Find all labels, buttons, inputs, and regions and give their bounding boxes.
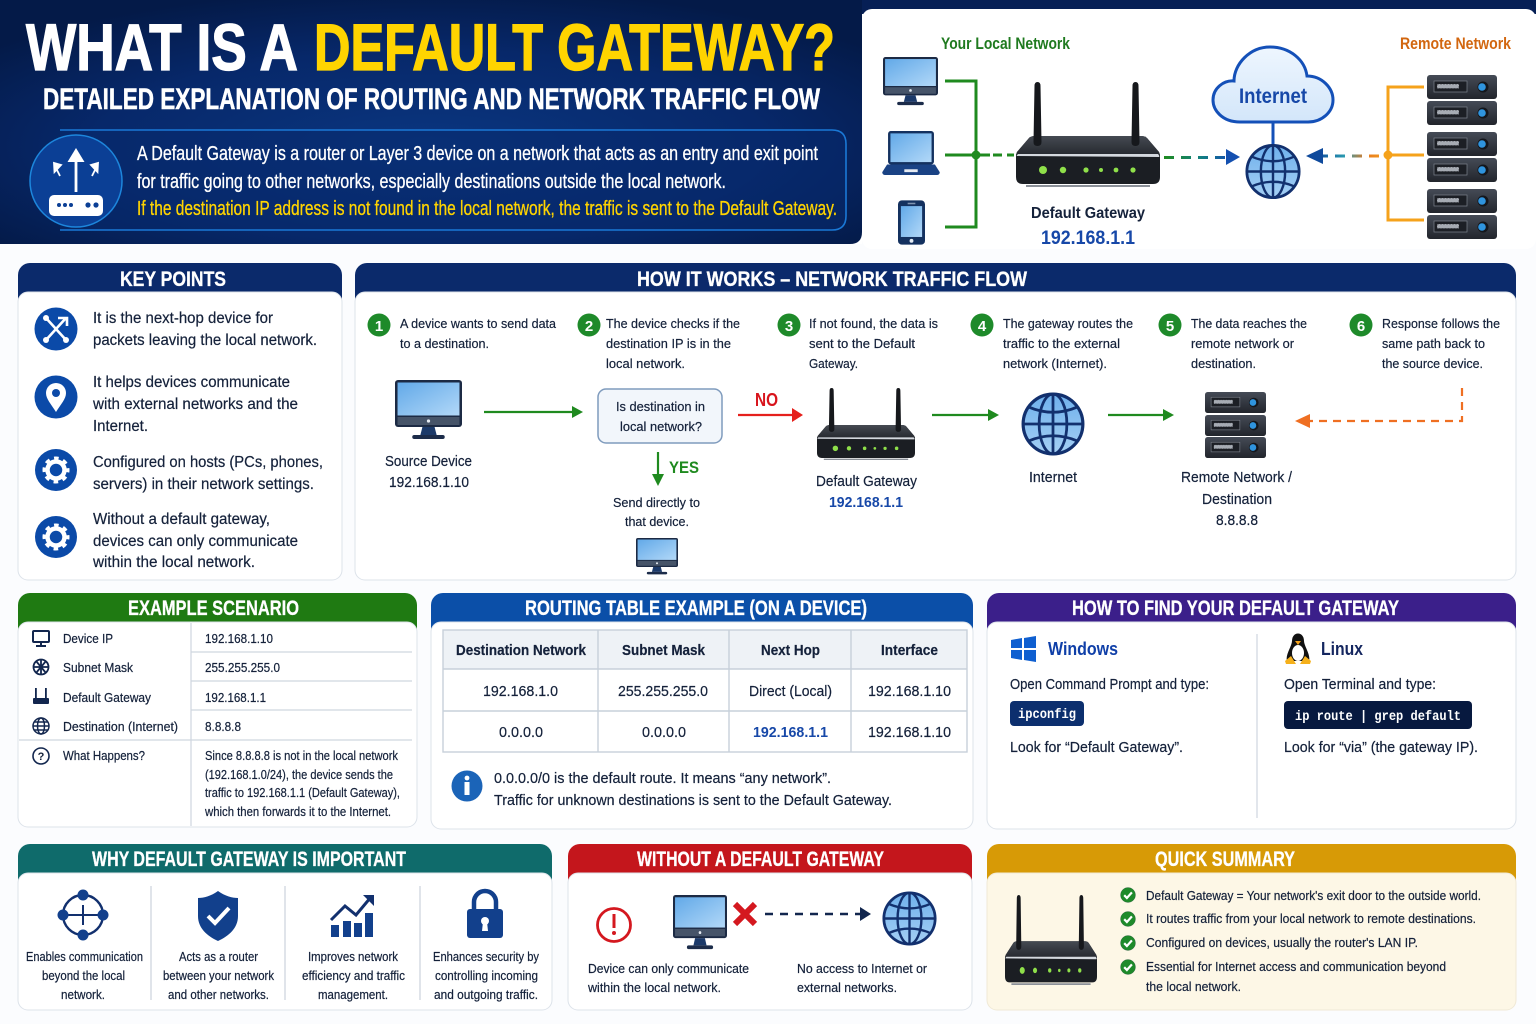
definition text: for traffic going to other networks, especially destinations outside the local network. <box>137 171 726 193</box>
step 1: to a destination. <box>400 336 489 351</box>
icon: globe <box>884 893 935 944</box>
note: default route <box>494 771 892 809</box>
panel: why important <box>18 844 552 1010</box>
step 4: 4 <box>978 318 987 335</box>
text: acts as router: Acts as a router <box>179 950 258 964</box>
panel: without gateway <box>568 844 972 1010</box>
checklist <box>1120 888 1481 994</box>
text: acts as router: between your network <box>163 969 275 983</box>
step 5 <box>1158 314 1307 371</box>
definition text <box>137 143 837 220</box>
step 3: sent to the Default <box>809 336 915 351</box>
arrow: yes <box>652 452 699 486</box>
row: device ip: 192.168.1.10 <box>205 632 273 646</box>
row: what happens: What Happens? <box>63 749 145 763</box>
default gateway label <box>816 474 918 511</box>
text: enables communication: Enables communication <box>26 950 143 964</box>
step 6: Response follows the <box>1382 316 1500 331</box>
step 3: If not found, the data is <box>809 316 938 331</box>
step 5: remote network or <box>1191 336 1295 351</box>
routing table: 0.0.0.0 <box>499 725 543 741</box>
text: no internet: external networks. <box>797 981 897 995</box>
row: device ip: Device IP <box>63 632 113 646</box>
step 1: A device wants to send data <box>400 316 557 331</box>
text: local only <box>587 962 749 995</box>
step 2: 2 <box>585 318 593 335</box>
routing table: 192.168.1.1 <box>753 725 828 741</box>
icon: warning <box>598 908 630 942</box>
text: without a gateway: within the local network. <box>92 554 255 571</box>
row: destination: 8.8.8.8 <box>205 720 241 734</box>
send directly text: Send directly to <box>613 495 700 510</box>
row: what happens: which then forwards it to the Internet. <box>204 805 391 819</box>
step 6: same path back to <box>1382 336 1485 351</box>
icon: internet globe <box>1023 394 1083 454</box>
label: remote network: Remote Network <box>1400 34 1511 53</box>
arrow: return path <box>1295 388 1462 428</box>
routing table <box>443 630 967 752</box>
icon: phone <box>898 200 925 245</box>
panel: routing table <box>431 593 973 829</box>
step 2: destination IP is in the <box>606 336 731 351</box>
routing table: Next Hop <box>761 643 820 659</box>
text: enhances security: and outgoing traffic. <box>434 988 538 1002</box>
icon: source device <box>395 380 462 439</box>
text: enables communication: beyond the local <box>42 969 125 983</box>
row: what happens <box>33 748 400 819</box>
routing table: 192.168.1.0 <box>483 684 558 700</box>
top banner panel <box>0 0 1536 249</box>
text: acts as router <box>163 950 275 1002</box>
step 5: destination. <box>1191 356 1256 371</box>
checklist: the local network. <box>1146 980 1241 994</box>
source device label: 192.168.1.10 <box>389 475 469 491</box>
row: what happens: traffic to 192.168.1.1 (Default Gateway), <box>205 786 400 800</box>
arrow: to internet <box>932 409 999 421</box>
routing table: Direct (Local) <box>749 684 832 700</box>
icon: router with arrows <box>30 135 122 227</box>
dashed arrow <box>765 907 871 921</box>
heading: ROUTING TABLE EXAMPLE (ON A DEVICE) <box>525 597 867 620</box>
linux steps <box>1284 677 1478 756</box>
step 6 <box>1350 314 1500 371</box>
heading: KEY POINTS <box>120 268 226 291</box>
routing table: 192.168.1.10 <box>868 684 951 700</box>
step 6: 6 <box>1357 318 1365 335</box>
decision box: Is destination in <box>616 399 705 414</box>
panel: quick summary <box>987 844 1516 1010</box>
row: destination <box>33 718 241 734</box>
icon: growth chart <box>331 895 374 937</box>
panel: example scenario <box>18 593 417 827</box>
row: what happens: ? <box>38 751 45 763</box>
step 2 <box>578 314 740 371</box>
icon: target device <box>636 538 678 574</box>
icon: internet cloud <box>1213 47 1333 146</box>
source device label <box>385 454 472 491</box>
definition text: A Default Gateway is a router or Layer 3 device on a network that acts as an entry and exit point <box>137 143 818 165</box>
callout: definition <box>30 130 846 230</box>
arrow: no <box>738 390 803 422</box>
windows steps: Look for “Default Gateway”. <box>1010 740 1183 756</box>
network diagram <box>882 34 1511 249</box>
remote network bus <box>1385 87 1424 220</box>
windows steps: ipconfig <box>1018 707 1076 723</box>
text: improves efficiency: efficiency and traffic <box>302 969 405 983</box>
text: improves efficiency: management. <box>318 988 388 1002</box>
icon: location pin <box>34 376 78 418</box>
text: enables communication <box>26 950 143 1002</box>
step 5: The data reaches the <box>1191 316 1307 331</box>
row: subnet mask: 255.255.255.0 <box>205 661 280 675</box>
source device label: Source Device <box>385 454 472 470</box>
routing table: Subnet Mask <box>622 643 706 659</box>
row: device ip <box>33 631 273 646</box>
icon: globe <box>1247 145 1299 198</box>
dashed arrow to globe <box>1164 149 1240 165</box>
panel: key points <box>18 263 342 580</box>
icon: monitor <box>673 895 727 949</box>
dashed arrow from remote <box>1306 148 1386 164</box>
linux steps: ip route | grep default <box>1295 709 1461 725</box>
subtitle: DETAILED EXPLANATION OF ROUTING AND NETWORK TRAFFIC FLOW <box>43 83 821 116</box>
step 4: traffic to the external <box>1003 336 1120 351</box>
title: DEFAULT GATEWAY? <box>314 10 835 84</box>
text: improves efficiency: Improves network <box>308 950 399 964</box>
arrow: no: NO <box>755 390 778 410</box>
heading: WITHOUT A DEFAULT GATEWAY <box>637 848 884 871</box>
step 2: local network. <box>606 356 685 371</box>
heading: EXAMPLE SCENARIO <box>128 597 299 620</box>
routing table: Interface <box>881 643 938 659</box>
text: external networks: Internet. <box>93 418 148 435</box>
icon: remote servers <box>1205 392 1266 458</box>
checklist: Configured on devices, usually the router's LAN IP. <box>1146 936 1418 950</box>
remote label: Remote Network / <box>1181 470 1293 486</box>
default gateway label: 192.168.1.1 <box>1041 228 1135 249</box>
text: without a gateway <box>92 511 298 571</box>
checklist: Essential for Internet access and communication beyond <box>1146 960 1446 974</box>
default gateway label: Default Gateway <box>816 474 918 490</box>
windows heading: Windows <box>1048 639 1118 659</box>
label: your local network: Your Local Network <box>941 34 1070 53</box>
heading: HOW TO FIND YOUR DEFAULT GATEWAY <box>1072 597 1399 620</box>
step 3 <box>778 314 938 371</box>
send directly text: that device. <box>625 514 689 529</box>
heading: WHY DEFAULT GATEWAY IS IMPORTANT <box>92 848 406 871</box>
text: external networks <box>92 374 298 435</box>
text: no internet <box>797 962 927 995</box>
windows steps <box>1010 677 1209 756</box>
panel: how it works <box>355 263 1516 580</box>
checklist: It routes traffic from your local network to remote destinations. <box>1146 912 1476 926</box>
text: configured on hosts: Configured on hosts (PCs, phones, <box>93 454 323 471</box>
text: enhances security: controlling incoming <box>435 969 538 983</box>
arrow: yes: YES <box>669 458 699 477</box>
text: no internet: No access to Internet or <box>797 962 927 976</box>
title: WHAT IS A <box>26 10 298 84</box>
row: what happens: Since 8.8.8.8 is not in the local network <box>205 749 399 763</box>
row: destination: Destination (Internet) <box>63 720 178 734</box>
step 2: The device checks if the <box>606 316 740 331</box>
step 3: 3 <box>785 318 793 335</box>
icon: windows <box>1011 636 1036 662</box>
note: default route: Traffic for unknown destinations is sent to the Default Gateway. <box>494 793 892 809</box>
row: subnet mask <box>33 659 280 675</box>
icon: internet cloud: Internet <box>1239 85 1307 108</box>
text: improves efficiency <box>302 950 405 1002</box>
decision box <box>598 389 722 443</box>
step 4: The gateway routes the <box>1003 316 1133 331</box>
icon: network circle <box>58 890 108 940</box>
text: local only: Device can only communicate <box>588 962 749 976</box>
icon: desktop <box>883 57 938 105</box>
icon: padlock <box>467 891 503 938</box>
remote label <box>1181 470 1293 529</box>
icon: red cross <box>735 904 755 924</box>
linux steps: Open Terminal and type: <box>1284 677 1436 693</box>
icon: laptop <box>882 131 940 175</box>
text: enhances security <box>433 950 540 1002</box>
row: subnet mask: Subnet Mask <box>63 661 134 675</box>
internet label: Internet <box>1029 470 1077 486</box>
default gateway label: Default Gateway <box>1031 205 1145 222</box>
text: next hop <box>93 310 317 349</box>
routing table: 255.255.255.0 <box>618 684 708 700</box>
remote label: Destination <box>1202 492 1272 508</box>
row: what happens: (192.168.1.0/24), the device sends the <box>205 768 393 782</box>
text: external networks: with external networks and the <box>92 396 298 413</box>
local network bus <box>945 81 1014 227</box>
text: external networks: It helps devices communicate <box>93 374 290 391</box>
arrow: to decision <box>484 406 583 418</box>
icon: router <box>1005 895 1097 985</box>
row: default gateway: 192.168.1.1 <box>205 691 266 705</box>
heading: QUICK SUMMARY <box>1155 848 1295 871</box>
icon: router <box>1016 82 1160 187</box>
default gateway label: 192.168.1.1 <box>829 495 903 511</box>
step 5: 5 <box>1166 318 1174 335</box>
text: configured on hosts <box>93 454 323 493</box>
text: acts as router: and other networks. <box>168 988 269 1002</box>
icon: gear <box>35 449 77 491</box>
text: enhances security: Enhances security by <box>433 950 540 964</box>
arrow: to remote <box>1108 409 1174 421</box>
text: next hop: packets leaving the local network. <box>93 332 317 349</box>
step 1 <box>368 314 557 351</box>
text: next hop: It is the next-hop device for <box>93 310 273 327</box>
routing table: 192.168.1.10 <box>868 725 951 741</box>
routing table: 0.0.0.0 <box>642 725 686 741</box>
icon: gear <box>35 516 77 558</box>
step 1: 1 <box>375 318 383 335</box>
text: local only: within the local network. <box>587 981 721 995</box>
linux steps: Look for “via” (the gateway IP). <box>1284 740 1478 756</box>
step 4: network (Internet). <box>1003 356 1107 371</box>
default gateway label <box>1031 205 1145 249</box>
icon: shield <box>198 891 238 941</box>
title <box>26 10 835 84</box>
decision box: local network? <box>620 419 702 434</box>
definition text: If the destination IP address is not found in the local network, the traffic is sent to the Default Gateway. <box>137 198 837 220</box>
text: configured on hosts: servers) in their network settings. <box>93 476 314 493</box>
linux heading: Linux <box>1321 639 1363 659</box>
row: default gateway: Default Gateway <box>63 691 152 705</box>
note: default route: 0.0.0.0/0 is the default route. It means “any network”. <box>494 771 831 787</box>
step 6: the source device. <box>1382 356 1483 371</box>
routing table: Destination Network <box>456 643 587 659</box>
windows steps: Open Command Prompt and type: <box>1010 677 1209 693</box>
icon: servers <box>1427 75 1497 239</box>
checklist: Default Gateway = Your network's exit door to the outside world. <box>1146 889 1481 903</box>
send directly text <box>613 495 700 529</box>
icon: linux penguin <box>1285 634 1311 664</box>
panel: how to find gateway <box>987 593 1516 829</box>
text: without a gateway: Without a default gateway, <box>93 511 270 528</box>
remote label: 8.8.8.8 <box>1216 513 1258 529</box>
step 3: Gateway. <box>809 356 858 371</box>
icon: default gateway router <box>817 388 915 460</box>
heading: HOW IT WORKS – NETWORK TRAFFIC FLOW <box>637 268 1027 291</box>
icon: info <box>452 770 482 802</box>
row: default gateway <box>33 688 266 705</box>
text: enables communication: network. <box>61 988 105 1002</box>
text: without a gateway: devices can only communicate <box>93 533 298 550</box>
icon: next hop arrows <box>34 308 78 350</box>
step 4 <box>970 314 1133 371</box>
